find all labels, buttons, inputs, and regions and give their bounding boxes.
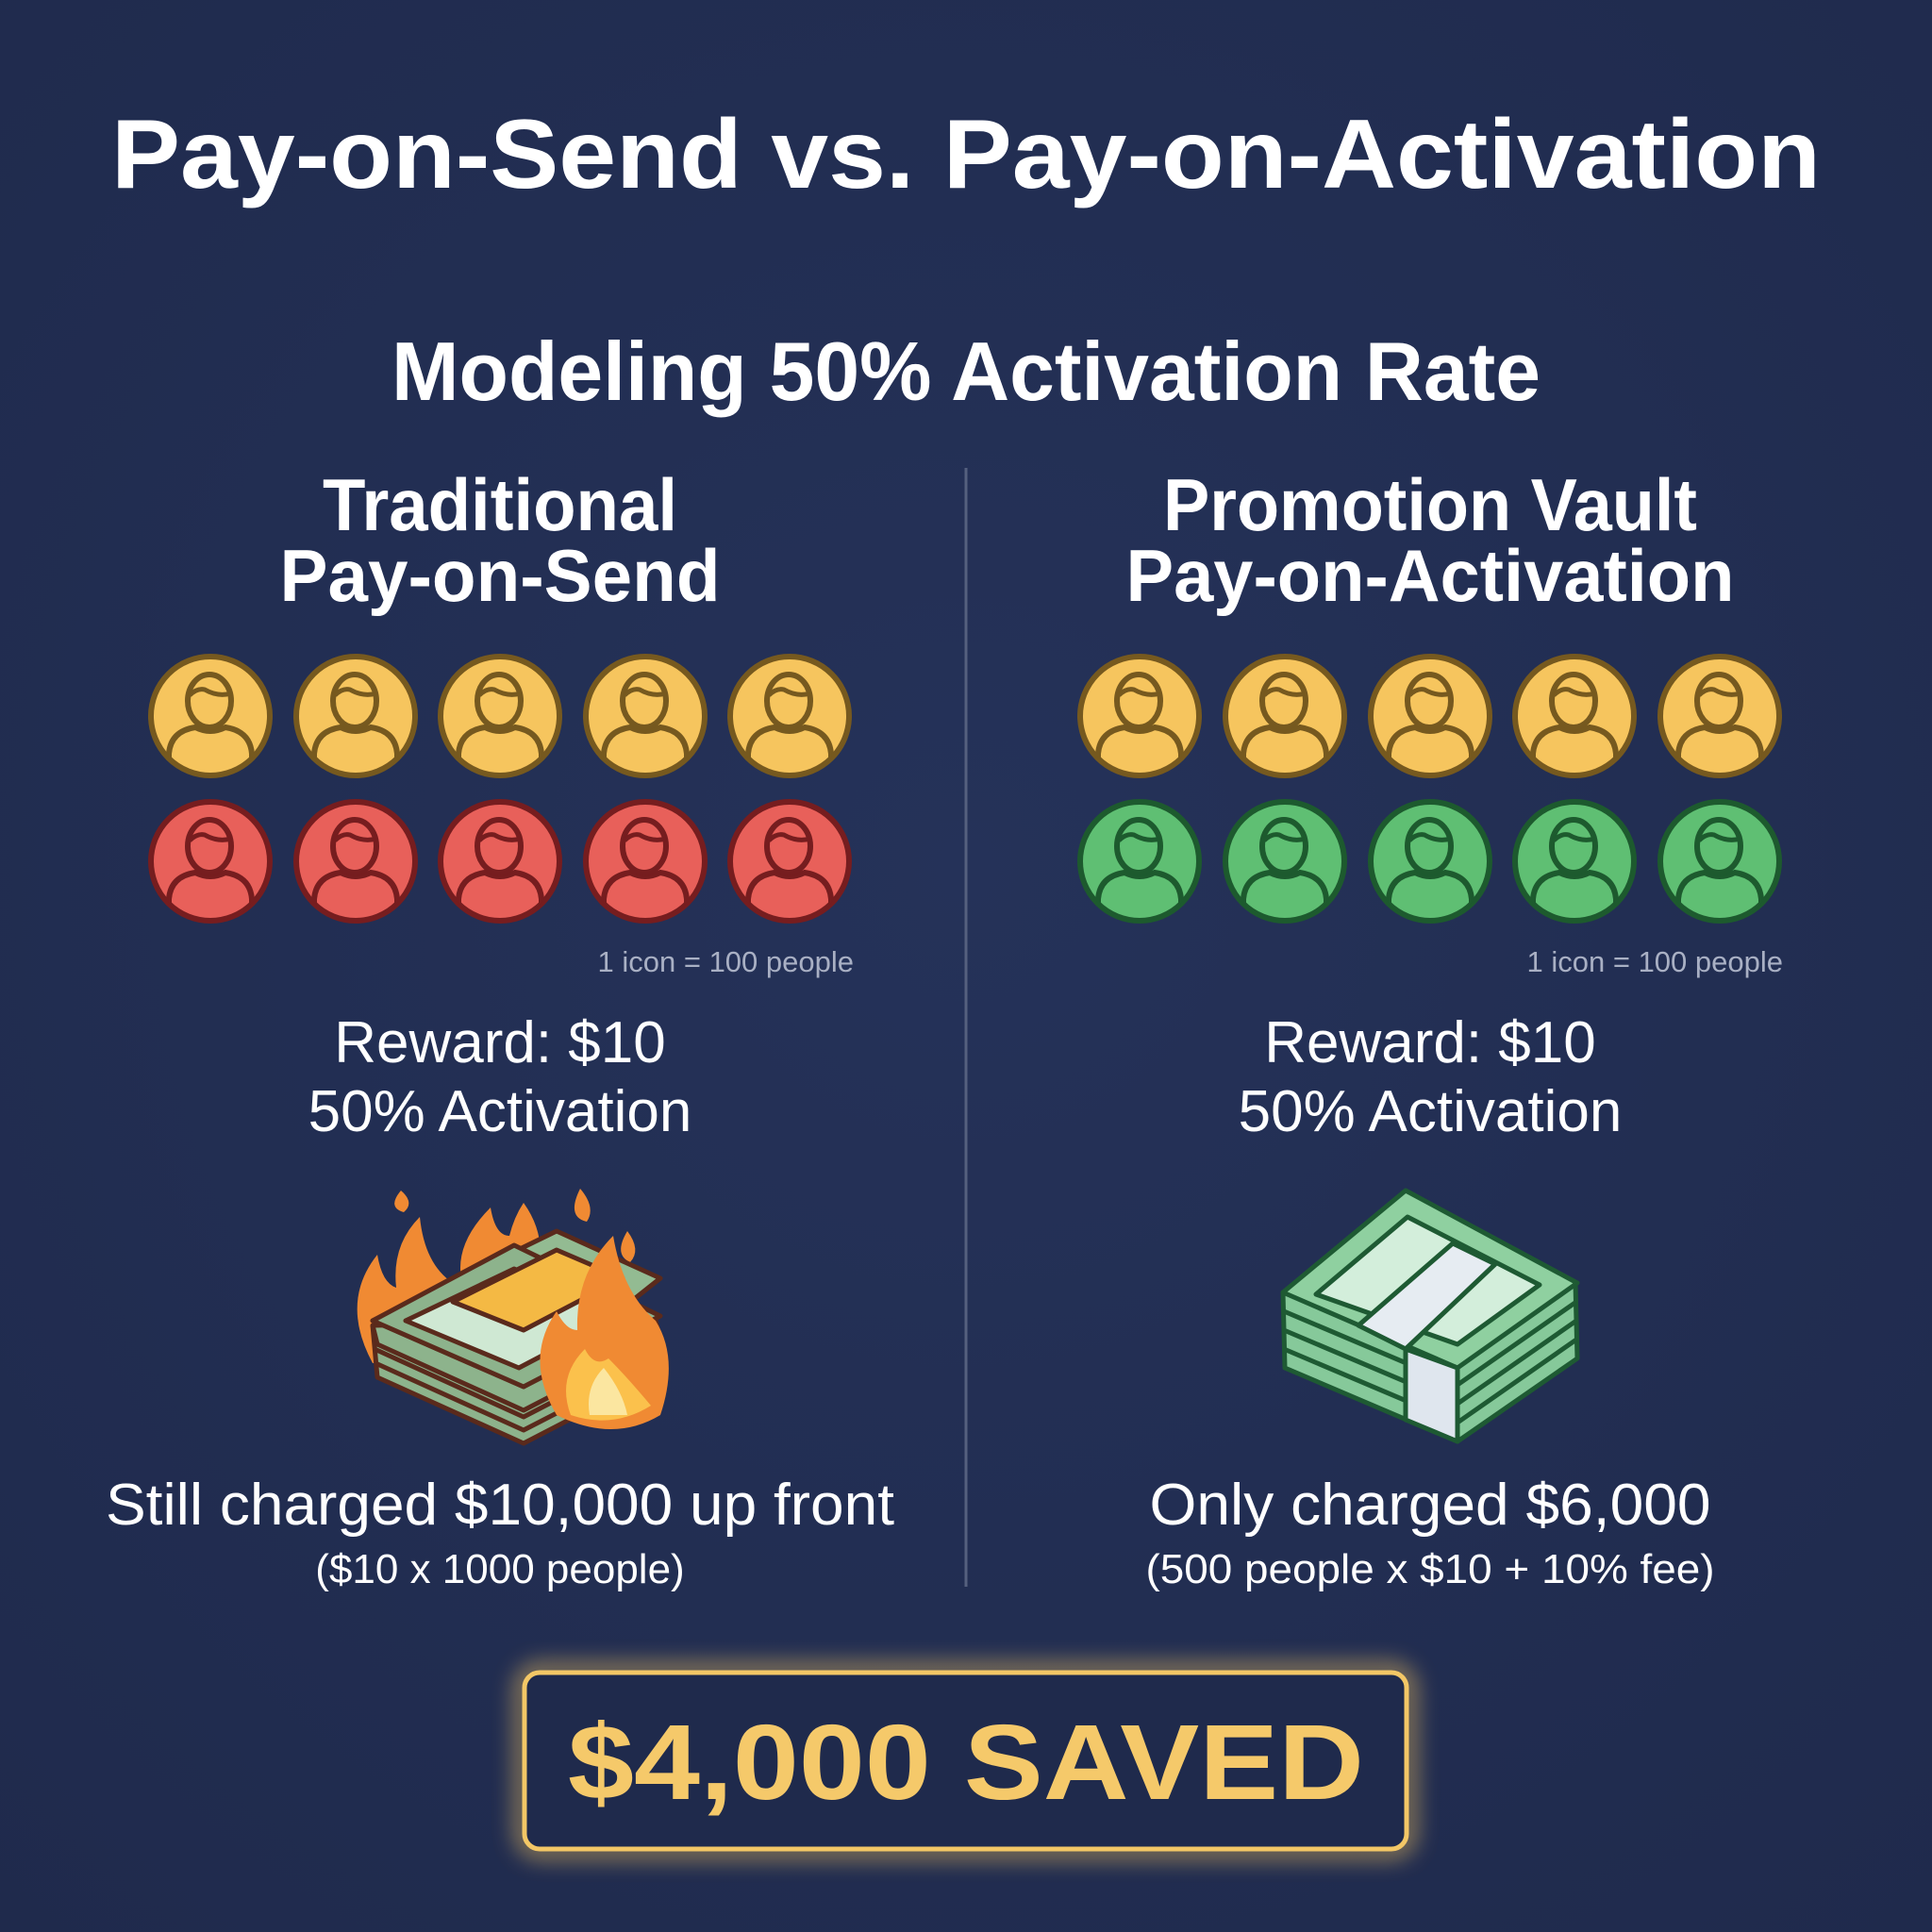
heading: traditional xyxy=(279,463,721,617)
stats text xyxy=(1239,1010,1622,1144)
subtitle: Modeling 50% Activation Rate xyxy=(391,325,1541,418)
panel: traditional pay-on-send xyxy=(106,463,894,1592)
panel: promotion vault pay-on-activation xyxy=(1080,463,1783,1592)
heading: promotion vault xyxy=(1126,463,1734,617)
title: Pay-on-Send vs. Pay-on-Activation xyxy=(111,100,1821,209)
heading: promotion vault: Promotion Vault xyxy=(1163,463,1697,546)
legend: 1 icon = 100 people xyxy=(598,945,854,978)
icon: money stack xyxy=(1283,1191,1577,1441)
callout: savings xyxy=(523,1671,1408,1851)
icon grid: 5 yellow, 5 green people xyxy=(1080,657,1779,921)
legend: 1 icon = 100 people xyxy=(1527,945,1783,978)
heading: traditional: Pay-on-Send xyxy=(279,534,721,617)
stats text xyxy=(308,1010,691,1144)
heading: traditional: Traditional xyxy=(323,463,677,546)
panel: traditional pay-on-send: ($10 x 1000 people) xyxy=(315,1546,685,1592)
cost text: Only charged $6,000 xyxy=(1149,1473,1711,1538)
stats text: Reward: $10 xyxy=(334,1010,666,1075)
heading: promotion vault: Pay-on-Activation xyxy=(1126,534,1734,617)
icon: burning money xyxy=(358,1189,669,1443)
panel: promotion vault pay-on-activation: (500 people x $10 + 10% fee) xyxy=(1145,1546,1715,1592)
cost text: Still charged $10,000 up front xyxy=(106,1473,894,1538)
stats text: 50% Activation xyxy=(308,1079,691,1144)
icon grid: 5 yellow, 5 red people xyxy=(151,657,849,921)
stats text: Reward: $10 xyxy=(1264,1010,1596,1075)
stats text: 50% Activation xyxy=(1239,1079,1622,1144)
callout: savings: $4,000 SAVED xyxy=(568,1703,1364,1822)
